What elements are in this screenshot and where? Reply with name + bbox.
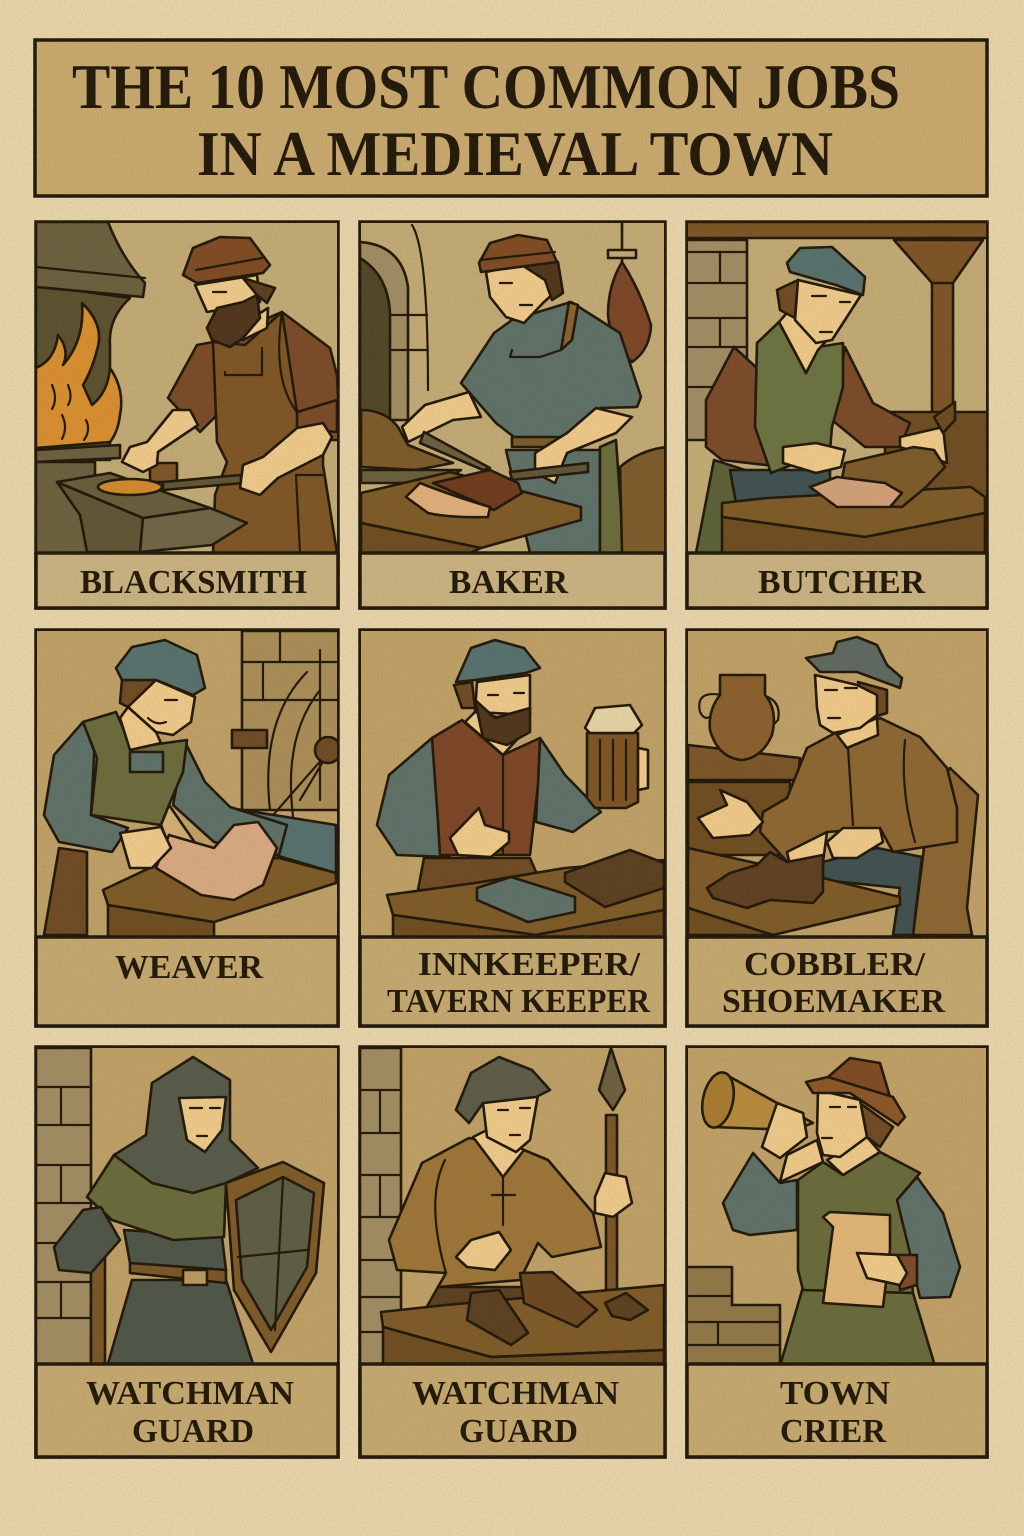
illustration: crier with horn and scroll [686,1048,986,1366]
label: baker: BAKER [449,564,568,601]
title banner [35,40,987,196]
innkeeper figure [377,640,601,890]
label: cobbler: SHOEMAKER [722,983,945,1020]
panel: blacksmith [36,222,340,608]
label: blacksmith [36,553,338,608]
beer mug [585,705,648,808]
label: weaver: WEAVER [115,949,263,986]
label: town crier: CRIER [780,1413,886,1450]
table and cloth [103,822,336,937]
label: town crier [687,1364,987,1457]
cobbler figure [698,637,957,935]
crier figure [723,1058,960,1366]
panel: baker [360,222,666,608]
label: watchman guard: WATCHMAN [412,1375,619,1412]
label: innkeeper: TAVERN KEEPER [387,983,650,1020]
illustration: weaver with cloth [37,631,341,937]
blacksmith figure [122,237,340,553]
label: watchman guard: GUARD [132,1413,254,1450]
label: baker [360,553,665,608]
jug [699,675,779,760]
label: butcher: BUTCHER [758,564,925,601]
shield [226,1162,324,1352]
bread and table [361,410,666,553]
illustration: butcher cutting meat [686,222,990,553]
panel: innkeeper [360,630,665,1026]
label: watchman guard [360,1364,665,1457]
illustration: baker with knife [360,223,666,553]
table and shoes [381,1272,664,1366]
table and ham [722,402,985,553]
panel: town crier [686,1047,987,1457]
illustration: guard with spear [360,1048,664,1366]
illustration: guard with shield [36,1048,337,1367]
label: blacksmith: BLACKSMITH [80,564,307,601]
label: watchman guard [36,1364,338,1457]
panel: butcher [686,222,990,608]
table with box and book [387,850,664,940]
butcher figure [696,247,947,553]
label: watchman guard: GUARD [459,1413,578,1450]
table and shoe [688,828,900,935]
title line 1: THE 10 MOST COMMON JOBS [72,51,900,122]
guard figure [389,1057,632,1310]
illustration: innkeeper with mug [361,631,664,940]
guard figure [54,1057,258,1367]
spear [599,1048,625,1290]
panel: cobbler [687,630,987,1026]
panel: watchman guard with shield [36,1047,338,1457]
illustration: cobbler with shoe [688,631,986,937]
weaver figure [44,640,287,935]
label: cobbler [687,937,987,1026]
illustration: blacksmith at forge [36,222,340,553]
label: innkeeper: INNKEEPER/ [418,946,641,983]
label: watchman guard: WATCHMAN [86,1375,294,1412]
baker figure [402,235,641,553]
title line 2: IN A MEDIEVAL TOWN [197,118,833,189]
panel: weaver [36,630,341,1026]
brick steps [686,1267,780,1366]
panel: watchman guard with spear [360,1047,665,1457]
label: cobbler: COBBLER/ [744,946,926,983]
label: innkeeper [360,937,665,1026]
anvil [57,473,247,552]
label: weaver [36,937,338,1026]
horn [698,1069,813,1131]
label: butcher [687,553,987,608]
label: town crier: TOWN [780,1375,890,1412]
scroll [823,1212,917,1307]
